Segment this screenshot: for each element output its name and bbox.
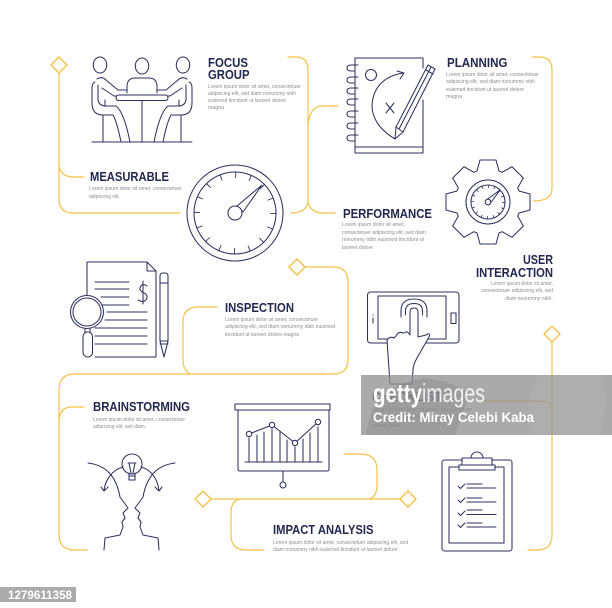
connector: measurable bracket — [51, 57, 180, 213]
text: measurable: adipiscing elit. — [89, 194, 120, 200]
icon: focus group people around a table — [92, 57, 192, 142]
watermark logo: getty — [373, 378, 422, 408]
text: impact analysis — [273, 522, 408, 553]
connector: planning bracket — [532, 57, 552, 201]
text: focus group: GROUP — [208, 67, 250, 82]
text: planning: PLANNING — [447, 55, 508, 70]
icon: presentation board with line chart — [235, 404, 330, 488]
text: performance — [342, 206, 432, 251]
text: impact analysis: Lorem ipsum dolor sit amet, consectetuer adipiscing elit, sed — [273, 540, 408, 546]
text: planning: adipiscing elit, sed diam nonummy nibh — [446, 79, 535, 85]
text: measurable: Lorem ipsum dolor sit amet, consectetuer — [89, 186, 182, 192]
connector: impact analysis bracket — [195, 454, 416, 550]
text: performance: nonummy nibh euismod tincidunt ut — [342, 237, 425, 243]
text: impact analysis: IMPACT ANALYSIS — [273, 522, 374, 537]
text: focus group: magna — [208, 105, 224, 111]
icon: notebook with game plan and pencil — [347, 58, 435, 153]
text: inspection: tincidunt ut laoreet dolore magna — [225, 332, 299, 338]
text: checklist under watermark: adipiscing elit, sed diam nonummy nibh — [372, 414, 472, 420]
text: performance: PERFORMANCE — [343, 206, 432, 221]
watermark logo — [373, 378, 485, 408]
text: performance: consectetuer adipiscing elit, sed diam — [342, 230, 426, 236]
text: user interaction: consectetuer adipiscing elit, sed — [481, 288, 553, 294]
text: user interaction: USER — [523, 252, 554, 267]
icon: gear with gauge — [446, 160, 530, 244]
icon: document with magnifier — [70, 262, 168, 357]
text: brainstorming: Lorem ipsum dolor sit amet, consectetuer — [93, 417, 185, 423]
text: user interaction — [476, 252, 554, 302]
text: focus group: euismod tincidunt ut laoreet dolore — [208, 98, 286, 104]
text: performance: laoreet dolore — [342, 245, 373, 251]
text: measurable: MEASURABLE — [90, 169, 169, 184]
text: brainstorming — [93, 399, 190, 430]
text: measurable — [89, 169, 182, 200]
text: user interaction: diam nonummy nibh. — [505, 296, 553, 302]
text: focus group: adipiscing elit, sed diam nonummy nibh — [208, 91, 296, 97]
text: performance: Lorem ipsum dolor sit amet, — [342, 222, 405, 228]
watermark logo: images — [422, 378, 485, 408]
watermark credit: Credit: Miray Celebi Kaba — [373, 409, 534, 425]
text: planning: Lorem ipsum dolor sit amet, consectetuer — [446, 72, 539, 78]
connector: checklist bracket — [483, 326, 560, 550]
text: impact analysis: diam nonummy nibh euismod tincidunt ut laoreet dolore. — [273, 547, 399, 553]
text: focus group: FOCUS — [208, 55, 248, 70]
text: user interaction: INTERACTION — [476, 265, 553, 280]
text: inspection: adipiscing elit, sed diam nonummy nibh euismod — [225, 324, 335, 330]
text: checklist under watermark: CHECKLIST — [372, 389, 442, 404]
connector: inspection loop — [59, 259, 348, 550]
text: brainstorming: BRAINSTORMING — [93, 399, 190, 414]
text: user interaction: Lorem ipsum dolor sit amet, — [491, 281, 553, 287]
image id tag — [0, 587, 76, 602]
icon: speedometer gauge — [187, 165, 283, 261]
text: planning: euismod tincidunt ut laoreet dolore — [446, 87, 524, 93]
text: planning: magna — [446, 94, 462, 100]
text: focus group: Lorem ipsum dolor sit amet, consectetuer — [208, 84, 301, 90]
image id tag: 1279611358 — [8, 590, 73, 602]
text: planning — [446, 55, 539, 100]
text: checklist under watermark — [372, 389, 472, 429]
text: inspection: INSPECTION — [225, 300, 294, 315]
text: checklist under watermark: Lorem ipsum dolor sit amet, consectetuer — [372, 407, 472, 413]
icon: smartphone with tapping hand — [368, 292, 459, 384]
text: brainstorming: adipiscing elit, sed diam. — [93, 424, 146, 430]
text: inspection — [225, 300, 335, 338]
connector: focus group and performance bracket — [288, 57, 338, 213]
watermark band — [361, 375, 612, 435]
icon: checklist clipboard — [442, 452, 512, 551]
icon: two faces sharing a light bulb idea — [88, 454, 175, 550]
text: focus group — [208, 55, 301, 111]
text: checklist under watermark: laoreet dolore — [372, 423, 402, 429]
text: inspection: Lorem ipsum dolor sit amet, consectetuer — [225, 317, 318, 323]
